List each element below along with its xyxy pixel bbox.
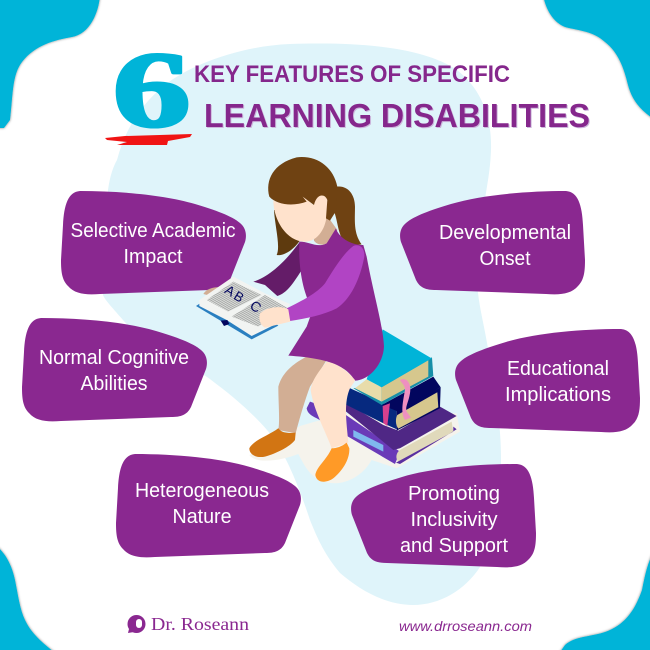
corner: bottom right xyxy=(558,550,650,650)
back shoe xyxy=(249,428,296,457)
pill: Promoting Inclusivity and Support: and Support xyxy=(400,535,508,557)
pill: Developmental Onset xyxy=(400,191,585,294)
bookmark ribbon xyxy=(400,379,411,420)
pill: Heterogeneous Nature: Heterogeneous xyxy=(135,480,269,502)
open book: C xyxy=(247,297,264,316)
ponytail xyxy=(333,186,362,247)
face xyxy=(273,195,327,242)
pill: Normal Cognitive Abilities: Normal Cognitive xyxy=(39,347,189,369)
corner: top right xyxy=(543,0,650,120)
pill: Selective Academic Impact: Selective Academic xyxy=(70,220,236,242)
pill: Selective Academic Impact xyxy=(61,191,246,294)
open book xyxy=(196,277,290,339)
open book: B xyxy=(231,288,247,306)
hair underside xyxy=(274,210,300,255)
illustration: girl reading on books xyxy=(196,157,460,483)
corner: top left xyxy=(0,0,100,128)
hair top xyxy=(268,157,337,221)
pill: Heterogeneous Nature xyxy=(116,454,301,557)
back arm xyxy=(253,242,302,296)
logo icon xyxy=(128,615,146,633)
pill: Promoting Inclusivity and Support xyxy=(351,464,536,567)
pill: Educational Implications xyxy=(455,329,640,432)
red underline scribble xyxy=(105,134,192,145)
pill: Developmental Onset: Onset xyxy=(480,248,531,270)
pill: Promoting Inclusivity and Support: Promoting xyxy=(408,483,500,505)
pill: Promoting Inclusivity and Support: Inclusivity xyxy=(410,509,498,531)
floor shadow xyxy=(249,413,460,483)
website url: www.drroseann.com xyxy=(399,618,532,634)
middle book xyxy=(340,377,441,431)
front leg xyxy=(311,362,355,448)
pill: Developmental Onset: Developmental xyxy=(439,222,571,244)
logo: Dr. Roseann: Dr. Roseann xyxy=(151,614,249,634)
neck xyxy=(313,215,337,245)
pill: Educational Implications: Implications xyxy=(505,384,611,406)
title number 6: 6 xyxy=(112,30,191,150)
pill: Educational Implications: Educational xyxy=(507,358,609,380)
dress xyxy=(288,228,384,381)
pill: Normal Cognitive Abilities: Abilities xyxy=(80,373,148,395)
front arm xyxy=(287,245,364,321)
pill: Heterogeneous Nature: Nature xyxy=(172,506,232,528)
front shoe xyxy=(315,443,349,482)
corner: bottom left xyxy=(0,545,58,650)
front hand xyxy=(259,307,290,328)
back hand xyxy=(203,287,222,297)
back leg xyxy=(278,357,327,433)
pill: Normal Cognitive Abilities xyxy=(22,318,207,421)
title line 2: LEARNING DISABILITIES xyxy=(204,97,590,134)
open book: A xyxy=(222,282,238,300)
top book xyxy=(353,329,433,405)
title line 1: KEY FEATURES OF SPECIFIC xyxy=(194,61,510,88)
background blob xyxy=(103,43,501,605)
pill: Selective Academic Impact: Impact xyxy=(124,246,183,268)
bottom book xyxy=(307,398,457,464)
